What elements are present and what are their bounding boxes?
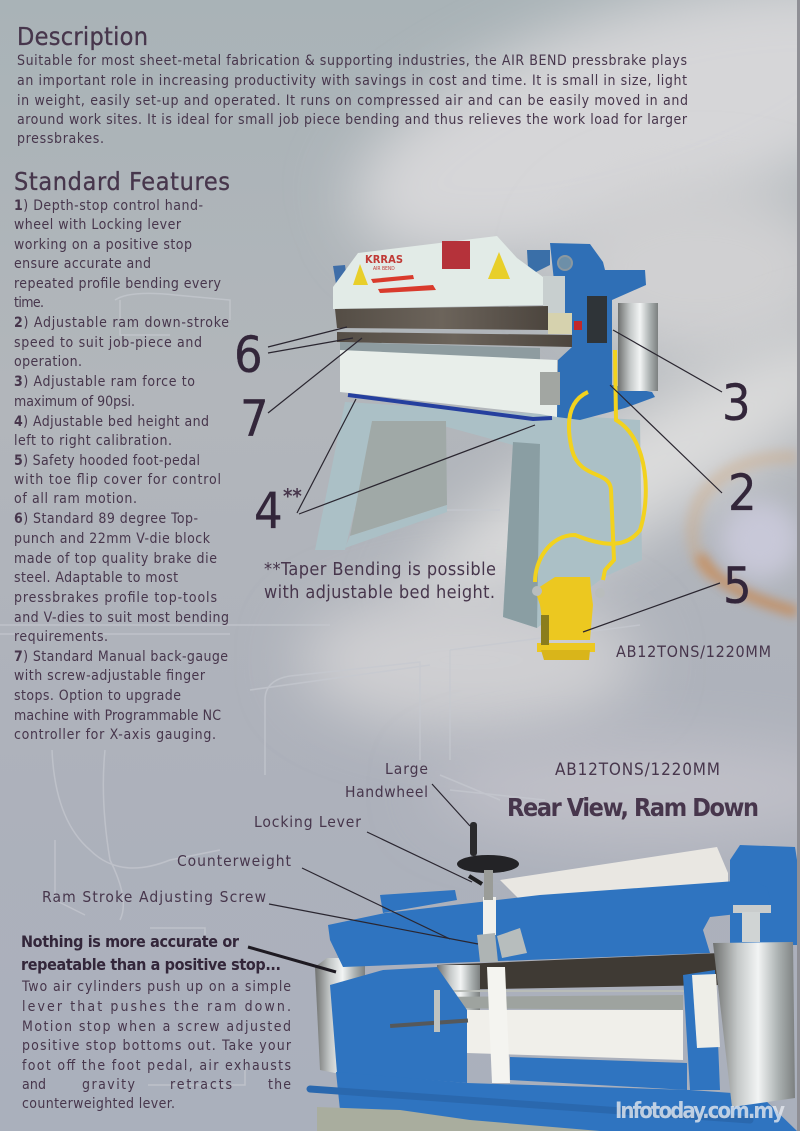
callout 6: punch and die leaders: 6: [234, 326, 263, 384]
blue side frame: [550, 243, 655, 420]
text block: description: an important role in increasing productivity with savings in cost and time. It is small in size, light: [17, 73, 687, 89]
callout paragraph: retracts: [170, 1077, 232, 1093]
callout paragraph: lever that pushes the ram down.: [22, 999, 291, 1015]
white piston rod lower: [487, 967, 510, 1083]
left air cylinder: [315, 958, 365, 1073]
text block: standard features list: time.: [14, 295, 44, 311]
callout 4: bed height leaders: **: [283, 484, 302, 508]
text block: standard features list: maximum of 90psi.: [14, 394, 135, 410]
text block: description: [17, 53, 688, 147]
heading: rear view: Rear View, Ram Down: [507, 793, 759, 822]
top blue bracket: [527, 250, 550, 272]
callout paragraph: and: [22, 1077, 46, 1093]
machine stand: [315, 402, 642, 628]
text block: standard features list: wheel with Locking lever: [14, 217, 182, 233]
text block: description: around work sites. It is ideal for small job piece bending and thus relieves the work load for larger: [17, 112, 688, 128]
main blue arm: [328, 880, 773, 967]
callout paragraph: Two air cylinders push up on a simple: [21, 979, 291, 995]
callout 2: ram speed leader: [610, 385, 757, 522]
label: locking lever: Locking Lever: [254, 813, 361, 831]
callout paragraph: foot off the foot pedal, air exhausts: [22, 1058, 291, 1074]
upper bracket: [543, 276, 565, 313]
adjusting screw bracket: [477, 928, 527, 962]
text block: description: in weight, easily set-up and operated. It runs on compressed air and can be easily moved in and: [17, 93, 688, 109]
note: taper bending: **Taper Bending is possible: [264, 559, 496, 580]
brand label: [353, 241, 510, 293]
text block: standard features list: 4) Adjustable bed height and: [14, 414, 209, 430]
pointer to cylinder: [248, 947, 336, 972]
air cylinder: [618, 303, 658, 391]
right blue housing: [730, 845, 797, 945]
gray base: [317, 1107, 600, 1131]
v-die block: [337, 332, 572, 347]
callout 3: ram force leader: [613, 330, 751, 432]
callout heading: repeatable than a positive stop...: [21, 955, 281, 974]
callout 3: ram force leader: 3: [722, 374, 751, 432]
text block: standard features list: working on a positive stop: [14, 237, 192, 253]
hump: [380, 890, 457, 913]
heading: standard features: Standard Features: [14, 167, 230, 196]
back gauge strip: [340, 342, 540, 360]
text block: standard features list: [14, 198, 229, 743]
text block: standard features list: operation.: [14, 354, 82, 370]
callout: positive stop: [21, 932, 336, 1112]
hood rear: [500, 847, 728, 900]
note: taper bending: [264, 559, 496, 603]
yellow foot pedal: [532, 577, 605, 660]
callout paragraph: positive stop bottoms out. Take your: [22, 1038, 292, 1054]
brand label: KRRAS: [365, 253, 403, 266]
text block: standard features list: requirements.: [14, 629, 108, 645]
text block: standard features list: of all ram motion.: [14, 491, 137, 507]
handwheel: [457, 822, 519, 900]
text block: standard features list: with screw-adjustable finger: [14, 668, 206, 684]
model label: front: AB12TONS/1220MM: [616, 642, 771, 661]
yellow air hoses: [535, 350, 646, 582]
callout heading: Nothing is more accurate or: [21, 932, 240, 951]
callout 4: bed height leaders: 4: [254, 482, 283, 540]
callout 5: foot pedal leader: 5: [723, 557, 752, 615]
lower white body: [340, 350, 557, 417]
text block: standard features list: 7) Standard Manual back-gauge: [14, 649, 228, 665]
text block: standard features list: punch and 22mm V-die block: [14, 531, 211, 547]
callout 7: back gauge leader: 7: [240, 390, 269, 448]
label: large handwheel: [345, 760, 470, 826]
right bracket: [683, 970, 720, 1090]
lower blue plate: [510, 1057, 687, 1090]
lever rod: [390, 1019, 468, 1028]
callout paragraph: Motion stop when a screw adjusted: [22, 1019, 291, 1035]
text block: description: Suitable for most sheet-metal fabrication & supporting industries, the AIR BEND pressbrake plays: [17, 53, 687, 69]
note: taper bending: with adjustable bed height.: [264, 582, 495, 603]
steel gauge bar: [420, 995, 683, 1010]
gauge dial: [558, 256, 572, 270]
text block: standard features list: 5) Safety hooded foot-pedal: [14, 453, 200, 469]
text block: standard features list: 2) Adjustable ram down-stroke: [14, 315, 229, 331]
brand label: AIR BEND: [373, 266, 395, 272]
callout paragraph: [21, 979, 292, 1112]
callout 5: foot pedal leader: [583, 557, 752, 632]
text block: standard features list: steel. Adaptable to most: [14, 570, 178, 586]
text block: standard features list: machine with Programmable NC: [14, 708, 221, 724]
blue base rail: [348, 395, 552, 419]
base blue: [336, 1072, 797, 1131]
text block: description: pressbrakes.: [17, 131, 104, 147]
right air cylinder: [713, 942, 795, 1107]
callout 2: ram speed leader: 2: [728, 464, 757, 522]
model label: rear: AB12TONS/1220MM: [555, 760, 720, 780]
top punch tool: [335, 306, 548, 330]
callout 4: bed height leaders: [254, 399, 535, 540]
callout paragraph: gravity: [82, 1077, 136, 1093]
machine hood: [333, 236, 543, 309]
label: large handwheel: Large: [385, 760, 428, 778]
text block: standard features list: 1) Depth-stop control hand-: [14, 198, 203, 214]
callout paragraph: the: [268, 1077, 291, 1093]
illustration: rear view of machine: [310, 822, 797, 1131]
text block: standard features list: repeated profile bending every: [14, 276, 222, 292]
text block: standard features list: left to right calibration.: [14, 433, 172, 449]
text block: standard features list: ensure accurate and: [14, 256, 151, 272]
label: ram stroke adjusting screw: Ram Stroke Adjusting Screw: [42, 888, 266, 906]
callout 6: punch and die leaders: [234, 326, 353, 384]
callout 7: back gauge leader: [240, 338, 362, 448]
locking lever: [469, 876, 482, 884]
text block: standard features list: 3) Adjustable ram force to: [14, 374, 195, 390]
bottom rail: [310, 1089, 750, 1120]
white piston rod upper: [483, 897, 496, 935]
label: counterweight: [177, 852, 450, 939]
text block: standard features list: stops. Option to upgrade: [14, 688, 181, 704]
dark slot and steel: [437, 953, 720, 990]
label: large handwheel: Handwheel: [345, 783, 428, 801]
watermark: Infotoday.com.my: [615, 1099, 785, 1124]
label: counterweight: Counterweight: [177, 852, 292, 870]
heading: description: Description: [17, 22, 148, 51]
text block: standard features list: with toe flip cover for control: [14, 472, 221, 488]
label: ram stroke adjusting screw: [42, 888, 478, 944]
air filter regulator: [574, 296, 607, 343]
text block: standard features list: 6) Standard 89 degree Top-: [14, 511, 198, 527]
callout paragraph: counterweighted lever.: [22, 1096, 175, 1112]
text block: standard features list: and V-dies to suit most bending: [14, 610, 229, 626]
lower left blue body: [330, 967, 467, 1083]
text block: standard features list: pressbrakes profile top-tools: [14, 590, 217, 606]
text block: standard features list: made of top quality brake die: [14, 551, 217, 567]
text block: standard features list: controller for X-axis gauging.: [14, 727, 216, 743]
callout heading: [21, 932, 281, 974]
label: locking lever: [254, 813, 472, 882]
illustration: air bend pressbrake front view: [315, 236, 658, 660]
text block: standard features list: speed to suit job-piece and: [14, 335, 202, 351]
white panel: [467, 1010, 683, 1060]
left blue bracket: [333, 265, 347, 284]
